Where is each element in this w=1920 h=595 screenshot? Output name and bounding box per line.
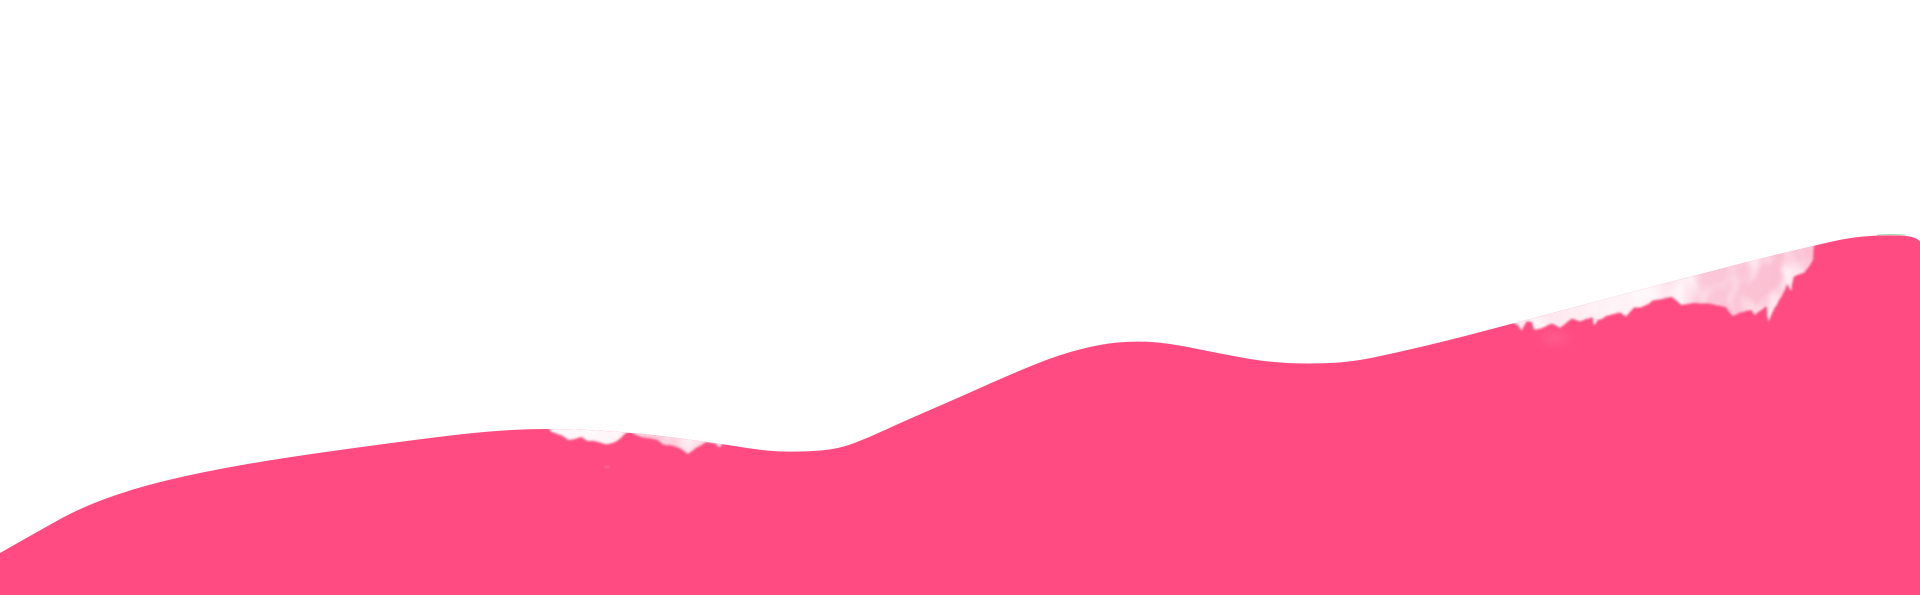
worn paint patch: upper right [1512,235,1814,344]
green edge line at top right [1877,234,1906,236]
illustration: pink wave landscape [0,234,1920,595]
worn paint patch: left [548,429,724,469]
pink wave shape [0,235,1920,595]
